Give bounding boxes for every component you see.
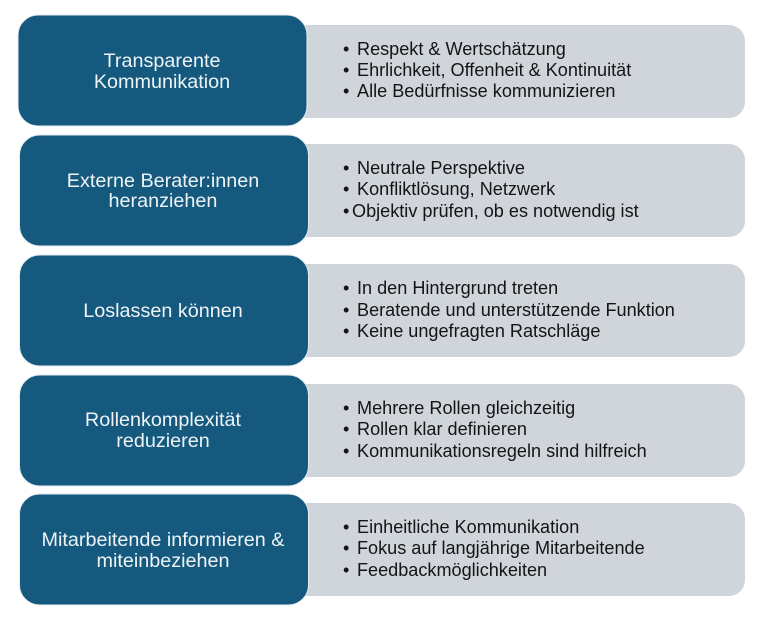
panel: row 2 details: •: [343, 158, 349, 178]
panel: row 3 details: •: [343, 321, 349, 341]
panel: row 5 details: •: [343, 517, 349, 537]
panel: row 4 details: Kommunikationsregeln sind hilfreich: [357, 441, 647, 461]
row 4: Rollenkomplexität reduzieren: [20, 375, 745, 486]
panel: row 5 heading: Mitarbeitende informieren &: [42, 529, 284, 551]
panel: row 4 details: Rollen klar definieren: [357, 419, 527, 439]
row 1: Transparente Kommunikation: [18, 15, 745, 126]
panel: row 2 details: •: [343, 201, 349, 221]
panel: row 4 details: [290, 384, 745, 477]
panel: row 3 details: Beratende und unterstützende Funktion: [357, 300, 675, 320]
panel: row 3 details: •: [343, 278, 349, 298]
panel: row 3 heading: Loslassen können: [83, 300, 243, 322]
panel: row 4 heading: reduzieren: [116, 430, 210, 452]
panel: row 3 details: •: [343, 300, 349, 320]
panel: row 1 details: [290, 25, 745, 118]
panel: row 2 details: Objektiv prüfen, ob es notwendig ist: [352, 201, 639, 221]
panel: row 1 heading: Transparente: [104, 50, 220, 72]
panel: row 3 heading: [20, 255, 308, 366]
panel: row 1 details: Alle Bedürfnisse kommunizieren: [357, 81, 615, 101]
panel: row 4 details: Mehrere Rollen gleichzeitig: [357, 398, 575, 418]
panel: row 2 details: •: [343, 179, 349, 199]
row 2: Externe Berater:innen heranziehen: [20, 135, 745, 246]
panel: row 2 heading: [20, 135, 308, 246]
panel: row 5 heading: miteinbeziehen: [96, 550, 230, 572]
panel: row 5 details: •: [343, 560, 349, 580]
panel: row 5 details: Fokus auf langjährige Mitarbeitende: [357, 538, 645, 558]
panel: row 4 heading: Rollenkomplexität: [85, 409, 242, 431]
panel: row 4 details: •: [343, 398, 349, 418]
panel: row 2 heading: Externe Berater:innen: [67, 170, 259, 192]
panel: row 1 heading: Kommunikation: [94, 71, 230, 93]
panel: row 2 heading: heranziehen: [109, 190, 217, 212]
panel: row 1 details: •: [343, 60, 349, 80]
panel: row 1 heading: [18, 15, 307, 126]
row 5: Mitarbeitende informieren & miteinbeziehen: [20, 494, 745, 605]
panel: row 3 details: In den Hintergrund treten: [357, 278, 558, 298]
panel: row 5 details: Einheitliche Kommunikation: [357, 517, 579, 537]
panel: row 2 details: Konfliktlösung, Netzwerk: [357, 179, 556, 199]
row 3: Loslassen können: [20, 255, 745, 366]
panel: row 5 heading: [20, 494, 308, 605]
panel: row 4 heading: [20, 375, 308, 486]
panel: row 2 details: [290, 144, 745, 237]
panel: row 1 details: •: [343, 39, 349, 59]
panel: row 5 details: •: [343, 538, 349, 558]
panel: row 5 details: Feedbackmöglichkeiten: [357, 560, 547, 580]
panel: row 2 details: Neutrale Perspektive: [357, 158, 525, 178]
panel: row 3 details: Keine ungefragten Ratschläge: [357, 321, 600, 341]
panel: row 4 details: •: [343, 441, 349, 461]
panel: row 1 details: Ehrlichkeit, Offenheit & Kontinuität: [357, 60, 631, 80]
panel: row 1 details: •: [343, 81, 349, 101]
panel: row 3 details: [290, 264, 745, 357]
panel: row 5 details: [290, 503, 745, 596]
panel: row 1 details: Respekt & Wertschätzung: [357, 39, 566, 59]
panel: row 4 details: •: [343, 419, 349, 439]
